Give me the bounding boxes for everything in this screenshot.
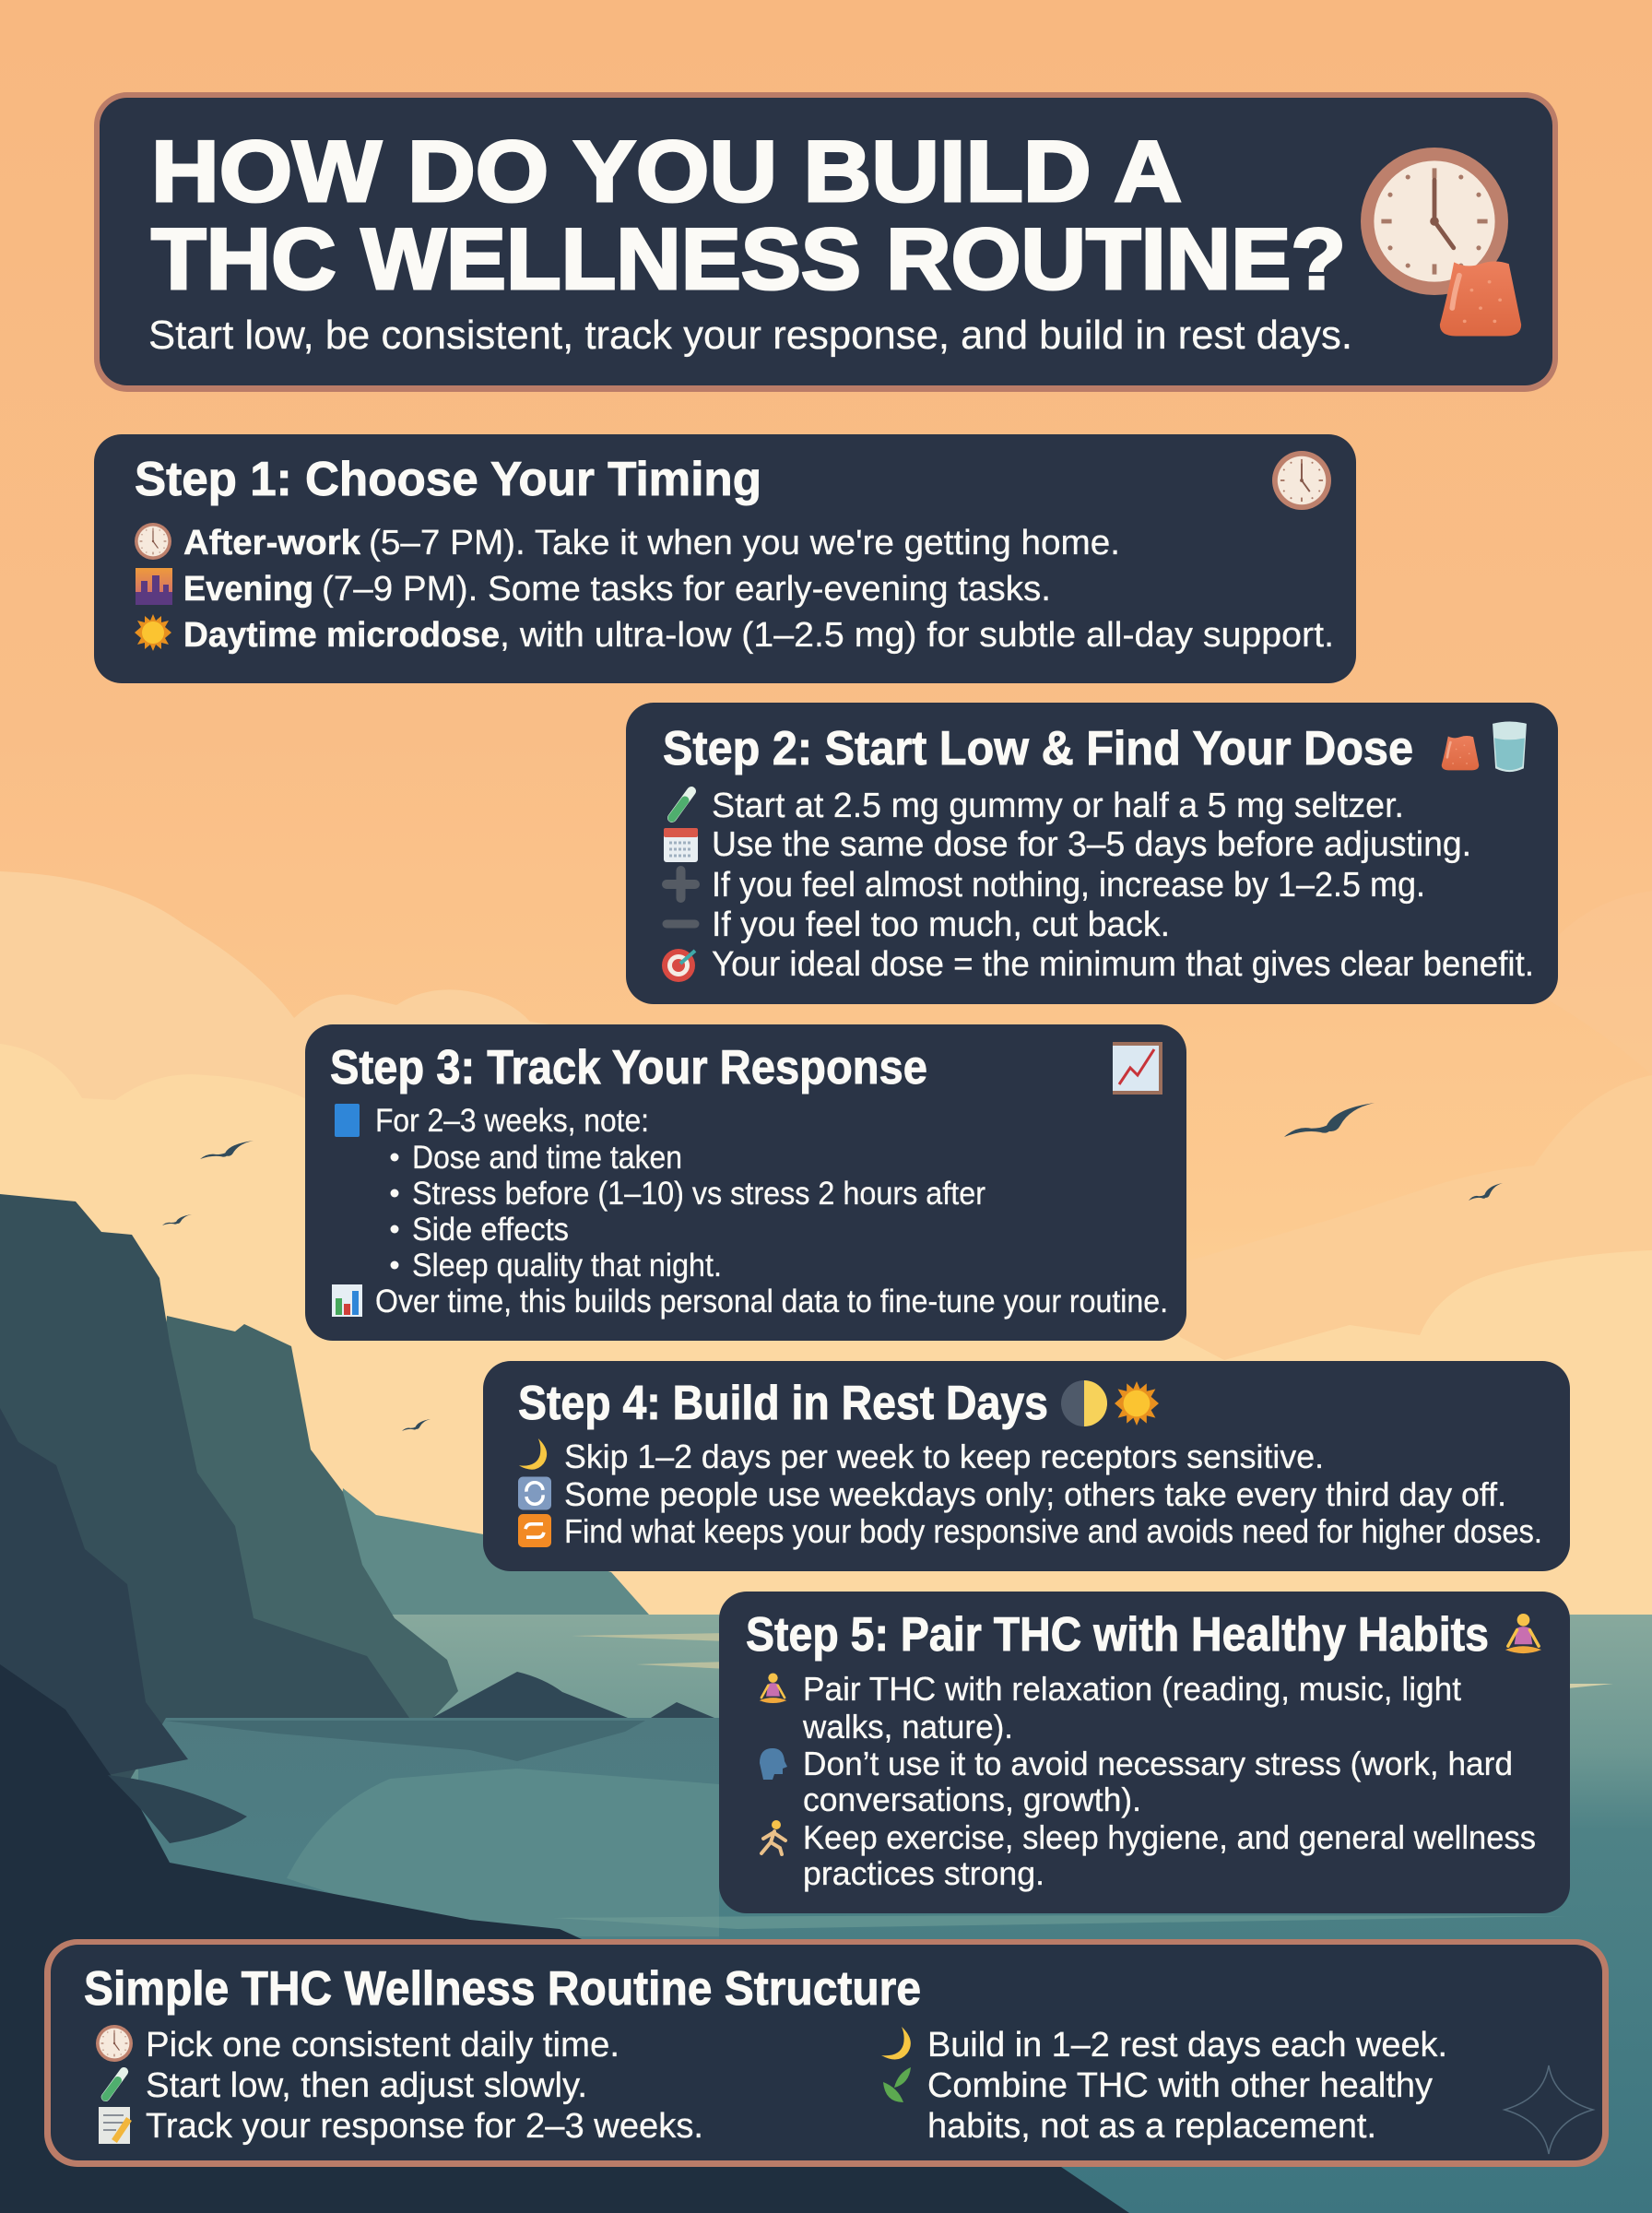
icon: faint star outline <box>1504 2065 1593 2154</box>
title <box>151 123 1346 307</box>
item: start low: Start low, then adjust slowly. <box>146 2066 587 2105</box>
item: same dose: Use the same dose for 3–5 days before adjusting. <box>712 825 1471 864</box>
background: clouds <box>0 871 1652 1623</box>
background: sea <box>0 1615 1652 2213</box>
item: evening: Evening <box>183 570 313 609</box>
item: combine: habits, not as a replacement. <box>927 2107 1376 2146</box>
item: ideal dose: Your ideal dose = the minimum that gives clear benefit. <box>712 945 1534 984</box>
list: notes: Sleep quality that night. <box>412 1248 722 1284</box>
background: mid cliffs <box>138 1316 458 1718</box>
list: notes: Stress before (1–10) vs stress 2 hours after <box>412 1176 985 1212</box>
list: notes: Dose and time taken <box>412 1140 682 1176</box>
title: HOW DO YOU BUILD A <box>151 123 1182 219</box>
background: spit <box>108 1775 247 1843</box>
item: responsive: Find what keeps your body responsive and avoids need for higher doses. <box>564 1512 1542 1550</box>
item: exercise: Keep exercise, sleep hygiene, and general wellness <box>803 1818 1536 1856</box>
item: necessary stress: conversations, growth). <box>803 1781 1141 1818</box>
list: notes <box>391 1140 985 1284</box>
item: combine: Combine THC with other healthy <box>927 2066 1433 2105</box>
step 3 heading: Step 3: Track Your Response <box>330 1041 927 1095</box>
item: daytime microdose: , with ultra-low (1–2.5 mg) for subtle all-day support. <box>500 616 1334 655</box>
item: exercise: practices strong. <box>803 1854 1044 1892</box>
item: relaxation: walks, nature). <box>802 1708 1013 1746</box>
panel: step 1 <box>94 434 1356 683</box>
panel: routine structure summary <box>44 1939 1609 2167</box>
item: weekdays: Some people use weekdays only; others take every third day off. <box>564 1475 1506 1513</box>
item: daily time: Pick one consistent daily time. <box>146 2026 620 2065</box>
item: relaxation: Pair THC with relaxation (reading, music, light <box>803 1670 1461 1708</box>
item: cut back: If you feel too much, cut back. <box>712 905 1170 944</box>
item: track: Track your response for 2–3 weeks. <box>146 2107 703 2146</box>
item: necessary stress <box>760 1745 1513 1818</box>
step 1 heading: Step 1: Choose Your Timing <box>135 453 761 506</box>
step 5 heading: Step 5: Pair THC with Healthy Habits <box>746 1608 1489 1662</box>
item: daytime microdose: Daytime microdose <box>183 616 500 655</box>
item: after-work: (5–7 PM). Take it when you we're getting home. <box>369 524 1120 562</box>
background: far headland <box>332 1488 649 1615</box>
background: darker cliff <box>0 1408 188 1844</box>
icon: sun <box>1115 1381 1159 1426</box>
item: exercise <box>761 1818 1536 1892</box>
background: dark cliff <box>0 1194 409 1844</box>
item: increase: If you feel almost nothing, increase by 1–2.5 mg. <box>712 866 1425 905</box>
icon: gummy <box>1442 736 1479 770</box>
item: start dose: Start at 2.5 mg gummy or half a 5 mg seltzer. <box>712 787 1404 825</box>
item: evening: (7–9 PM). Some tasks for early-evening tasks. <box>322 570 1051 609</box>
panel: title header <box>94 92 1558 392</box>
icon: water glass <box>1493 721 1527 772</box>
item: personal data: Over time, this builds personal data to fine-tune your routine. <box>375 1284 1168 1320</box>
title: THC WELLNESS ROUTINE? <box>151 210 1346 307</box>
list: notes: Side effects <box>412 1212 569 1248</box>
subtitle: Start low, be consistent, track your response, and build in rest days. <box>148 313 1352 358</box>
item: daytime microdose <box>135 614 1334 655</box>
panel: step 5 <box>719 1592 1570 1913</box>
background: foreground shore <box>0 1664 1129 2213</box>
icon: half moon <box>1061 1380 1107 1426</box>
panel: step 2 <box>626 703 1558 1004</box>
icon: clock <box>1272 451 1331 510</box>
item: skip days: Skip 1–2 days per week to keep receptors sensitive. <box>564 1438 1324 1475</box>
step 4 heading: Step 4: Build in Rest Days <box>518 1377 1048 1430</box>
birds <box>162 1103 1503 1431</box>
background: sunset sky <box>0 0 1652 1623</box>
item: rest days: Build in 1–2 rest days each week. <box>927 2026 1447 2065</box>
item: relaxation <box>760 1670 1461 1746</box>
item: for 2-3 weeks: For 2–3 weeks, note: <box>375 1103 649 1139</box>
icon: clock <box>1361 148 1508 295</box>
step 2 heading: Step 2: Start Low & Find Your Dose <box>663 722 1413 775</box>
summary heading: Simple THC Wellness Routine Structure <box>84 1962 921 2016</box>
item: combine <box>883 2066 1433 2146</box>
background: islands <box>432 1672 714 1718</box>
background: water highlights <box>138 1633 1613 1939</box>
icon: gummy <box>1440 261 1521 336</box>
icon: meditating person <box>1505 1614 1541 1653</box>
panel: step 4 <box>483 1361 1570 1571</box>
item: necessary stress: Don’t use it to avoid necessary stress (work, hard <box>803 1745 1513 1782</box>
icon: chart notebook <box>1113 1042 1162 1095</box>
item: after-work: After-work <box>183 524 361 562</box>
panel: step 3 <box>305 1024 1186 1341</box>
